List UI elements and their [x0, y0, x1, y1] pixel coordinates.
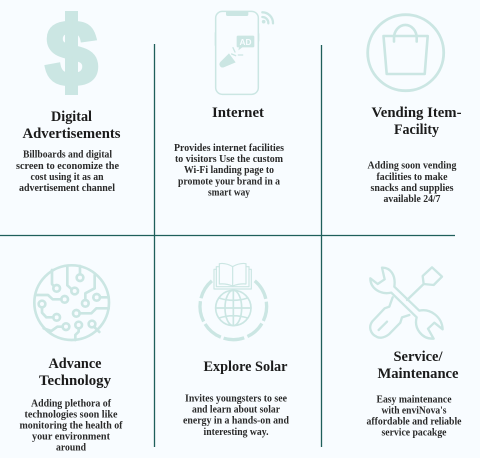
text: explore solar description: energy in a hands-on and	[183, 416, 289, 426]
heading: vending item facility: Facility	[394, 122, 439, 138]
text: service description: service pacakge	[382, 428, 447, 438]
text: internet description	[174, 143, 284, 198]
text: vending description: facilities to make	[376, 172, 448, 183]
icon: crossed wrench and screwdriver	[370, 267, 443, 339]
text: service description: affordable and reliable	[366, 416, 462, 428]
heading: vending item facility	[372, 105, 462, 138]
icon: shopping bag in circle	[368, 15, 444, 91]
icon: circuit circle	[34, 265, 109, 340]
text: vending description: available 24/7	[384, 194, 440, 205]
text: digital advertisements description: advertisement channel	[19, 183, 115, 194]
text: advance technology description: your environment	[32, 432, 111, 442]
text: advance technology description: Adding plethora of	[31, 398, 112, 410]
heading: service maintenance	[378, 349, 459, 382]
panel: vending item facility	[368, 15, 462, 205]
heading: service maintenance: Service/	[394, 349, 443, 365]
text: vending description: snacks and supplies	[370, 183, 454, 194]
panel: advance technology	[20, 265, 123, 454]
text: advance technology description	[20, 398, 123, 454]
text: internet description: smart way	[208, 188, 251, 198]
text: internet description: promote your brand in a	[178, 176, 280, 188]
panel: service maintenance	[366, 267, 462, 438]
heading: advance technology: Technology	[39, 373, 111, 389]
icon: book, globe and ring	[200, 263, 267, 340]
text: vending description: Adding soon vending	[368, 160, 457, 172]
text: advance technology description: technologies soon like	[24, 410, 118, 420]
heading: digital advertisements: Digital	[51, 109, 92, 125]
text: internet description: to visitors Use the custom	[175, 154, 283, 165]
text: service description: Easy maintenance	[376, 394, 452, 406]
panel: internet	[174, 11, 284, 198]
text: service description: with enviNova's	[382, 406, 446, 416]
text: explore solar description	[183, 394, 289, 438]
panel: digital advertisements	[16, 3, 121, 194]
text: explore solar description: interesting way.	[204, 427, 269, 438]
text: explore solar description: Invites youngsters to see	[185, 394, 287, 404]
panel: explore solar	[183, 263, 289, 438]
text: digital advertisements description	[16, 150, 119, 194]
text: vending description	[368, 160, 457, 205]
heading: digital advertisements	[22, 109, 121, 142]
text: advance technology description: around	[56, 442, 86, 454]
heading: advance technology	[39, 356, 111, 389]
heading: service maintenance: Maintenance	[378, 366, 459, 382]
text: digital advertisements description: cost using it as an	[30, 172, 104, 183]
text: advance technology description: monitoring the health of	[20, 420, 123, 432]
icon: phone with advert and wifi: AD	[239, 37, 252, 47]
heading: internet: Internet	[212, 105, 264, 121]
text: service description	[366, 394, 462, 438]
heading: digital advertisements: Advertisements	[22, 126, 121, 142]
text: digital advertisements description: screen to economize the	[16, 161, 119, 172]
heading: explore solar: Explore Solar	[204, 359, 288, 375]
text: digital advertisements description: Billboards and digital	[23, 150, 112, 160]
text: internet description: Provides internet facilities	[174, 143, 284, 154]
icon: dollar sign: $	[46, 3, 98, 105]
heading: advance technology: Advance	[48, 356, 102, 372]
text: explore solar description: and learn about solar	[192, 404, 280, 416]
icon: phone with advert and wifi	[215, 11, 273, 94]
heading: vending item facility: Vending Item-	[372, 105, 462, 121]
text: internet description: Wi-Fi landing page to	[184, 165, 274, 176]
